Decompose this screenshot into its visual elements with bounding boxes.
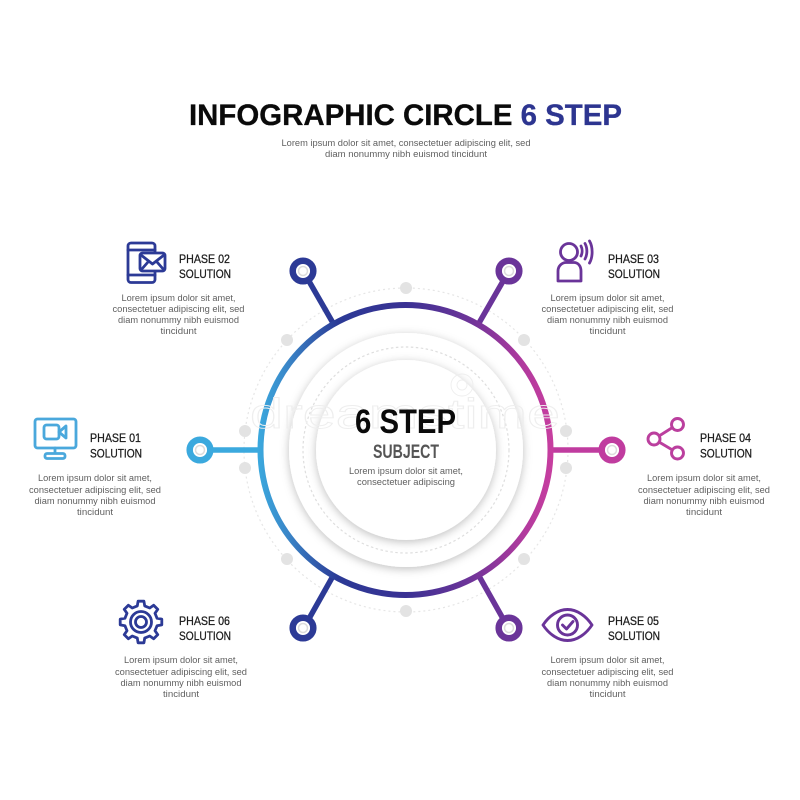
body text: tincidunt [77, 507, 113, 518]
heading: SOLUTION [700, 446, 752, 460]
body text: tincidunt [590, 689, 626, 700]
body text: Lorem ipsum dolor sit amet, [647, 473, 761, 484]
body text: Lorem ipsum dolor sit amet, [38, 473, 152, 484]
body text: tincidunt [163, 689, 199, 700]
panel: phase 01 [29, 419, 161, 518]
watermark [250, 374, 560, 437]
body text: diam nonummy nibh euismod [34, 496, 156, 507]
node: phase 01 [190, 440, 210, 460]
center body text [349, 466, 463, 488]
icon: monitor with video camera [35, 419, 76, 458]
body text: diam nonummy nibh euismod [547, 315, 668, 326]
body text: consectetuer adipiscing elit, sed [115, 667, 247, 678]
body text: consectetuer adipiscing elit, sed [112, 304, 244, 315]
body text [112, 293, 244, 337]
outer dotted ring with markers [239, 282, 572, 617]
body text: diam nonummy nibh euismod [118, 315, 239, 326]
subtitle [282, 138, 530, 160]
heading [179, 614, 231, 643]
connector lines [205, 276, 607, 624]
body text: diam nonummy nibh euismod [547, 678, 668, 689]
body text: Lorem ipsum dolor sit amet, [122, 293, 236, 304]
body text [115, 655, 247, 700]
heading [179, 252, 231, 281]
heading: SOLUTION [179, 629, 231, 643]
title: INFOGRAPHIC CIRCLE 6 STEP [189, 99, 622, 132]
icon: eye with check [543, 610, 592, 640]
heading: SOLUTION [179, 267, 231, 281]
center heading: 6 STEP [355, 403, 456, 441]
heading: PHASE 06 [179, 614, 230, 628]
inner disc [316, 360, 496, 540]
node: phase 03 [499, 261, 519, 281]
panel: phase 05 [542, 610, 674, 700]
heading: SOLUTION [608, 629, 660, 643]
icon: person with sound waves [558, 241, 592, 281]
icon: phone with envelope [128, 243, 165, 282]
heading: SOLUTION [90, 446, 142, 460]
center body text: consectetuer adipiscing [357, 477, 455, 488]
middle disc [289, 333, 523, 567]
node: phase 06 [293, 618, 313, 638]
body text [542, 655, 674, 700]
panel: phase 06 [115, 601, 247, 700]
icon: gear [120, 601, 162, 643]
subtitle: diam nonummy nibh euismod tincidunt [325, 149, 487, 160]
center subject: SUBJECT [373, 442, 439, 463]
heading [700, 431, 752, 460]
panel: phase 02 [112, 243, 244, 337]
body text: tincidunt [160, 326, 197, 337]
body text: consectetuer adipiscing elit, sed [542, 667, 674, 678]
subtitle: Lorem ipsum dolor sit amet, consectetuer adipiscing elit, sed [282, 138, 530, 149]
node: phase 04 [602, 440, 622, 460]
panel: phase 04 [638, 418, 770, 518]
body text [542, 293, 674, 337]
node: phase 02 [293, 261, 313, 281]
body text: Lorem ipsum dolor sit amet, [550, 655, 664, 666]
heading: PHASE 05 [608, 614, 659, 628]
body text: tincidunt [686, 507, 722, 518]
heading [608, 614, 660, 643]
gradient outer ring [260, 305, 550, 595]
body text: Lorem ipsum dolor sit amet, [124, 655, 238, 666]
watermark: dreamstime [250, 390, 560, 437]
body text: tincidunt [590, 326, 626, 337]
panel: phase 03 [542, 241, 674, 337]
center body text: Lorem ipsum dolor sit amet, [349, 466, 463, 477]
heading: PHASE 01 [90, 431, 141, 445]
body text: diam nonummy nibh euismod [120, 678, 242, 689]
node: phase 05 [499, 618, 519, 638]
heading [608, 252, 660, 281]
inner dotted ring [303, 347, 509, 553]
body text: Lorem ipsum dolor sit amet, [550, 293, 664, 304]
body text: diam nonummy nibh euismod [644, 496, 764, 507]
body text [638, 473, 770, 518]
heading: PHASE 04 [700, 431, 751, 445]
body text: consectetuer adipiscing elit, sed [542, 304, 674, 315]
body text [29, 473, 161, 518]
heading: SOLUTION [608, 267, 660, 281]
icon: share nodes [648, 418, 684, 459]
heading: PHASE 03 [608, 252, 659, 266]
body text: consectetuer adipiscing elit, sed [29, 485, 161, 496]
heading [90, 431, 142, 460]
body text: consectetuer adipiscing elit, sed [638, 485, 770, 496]
heading: PHASE 02 [179, 252, 230, 266]
